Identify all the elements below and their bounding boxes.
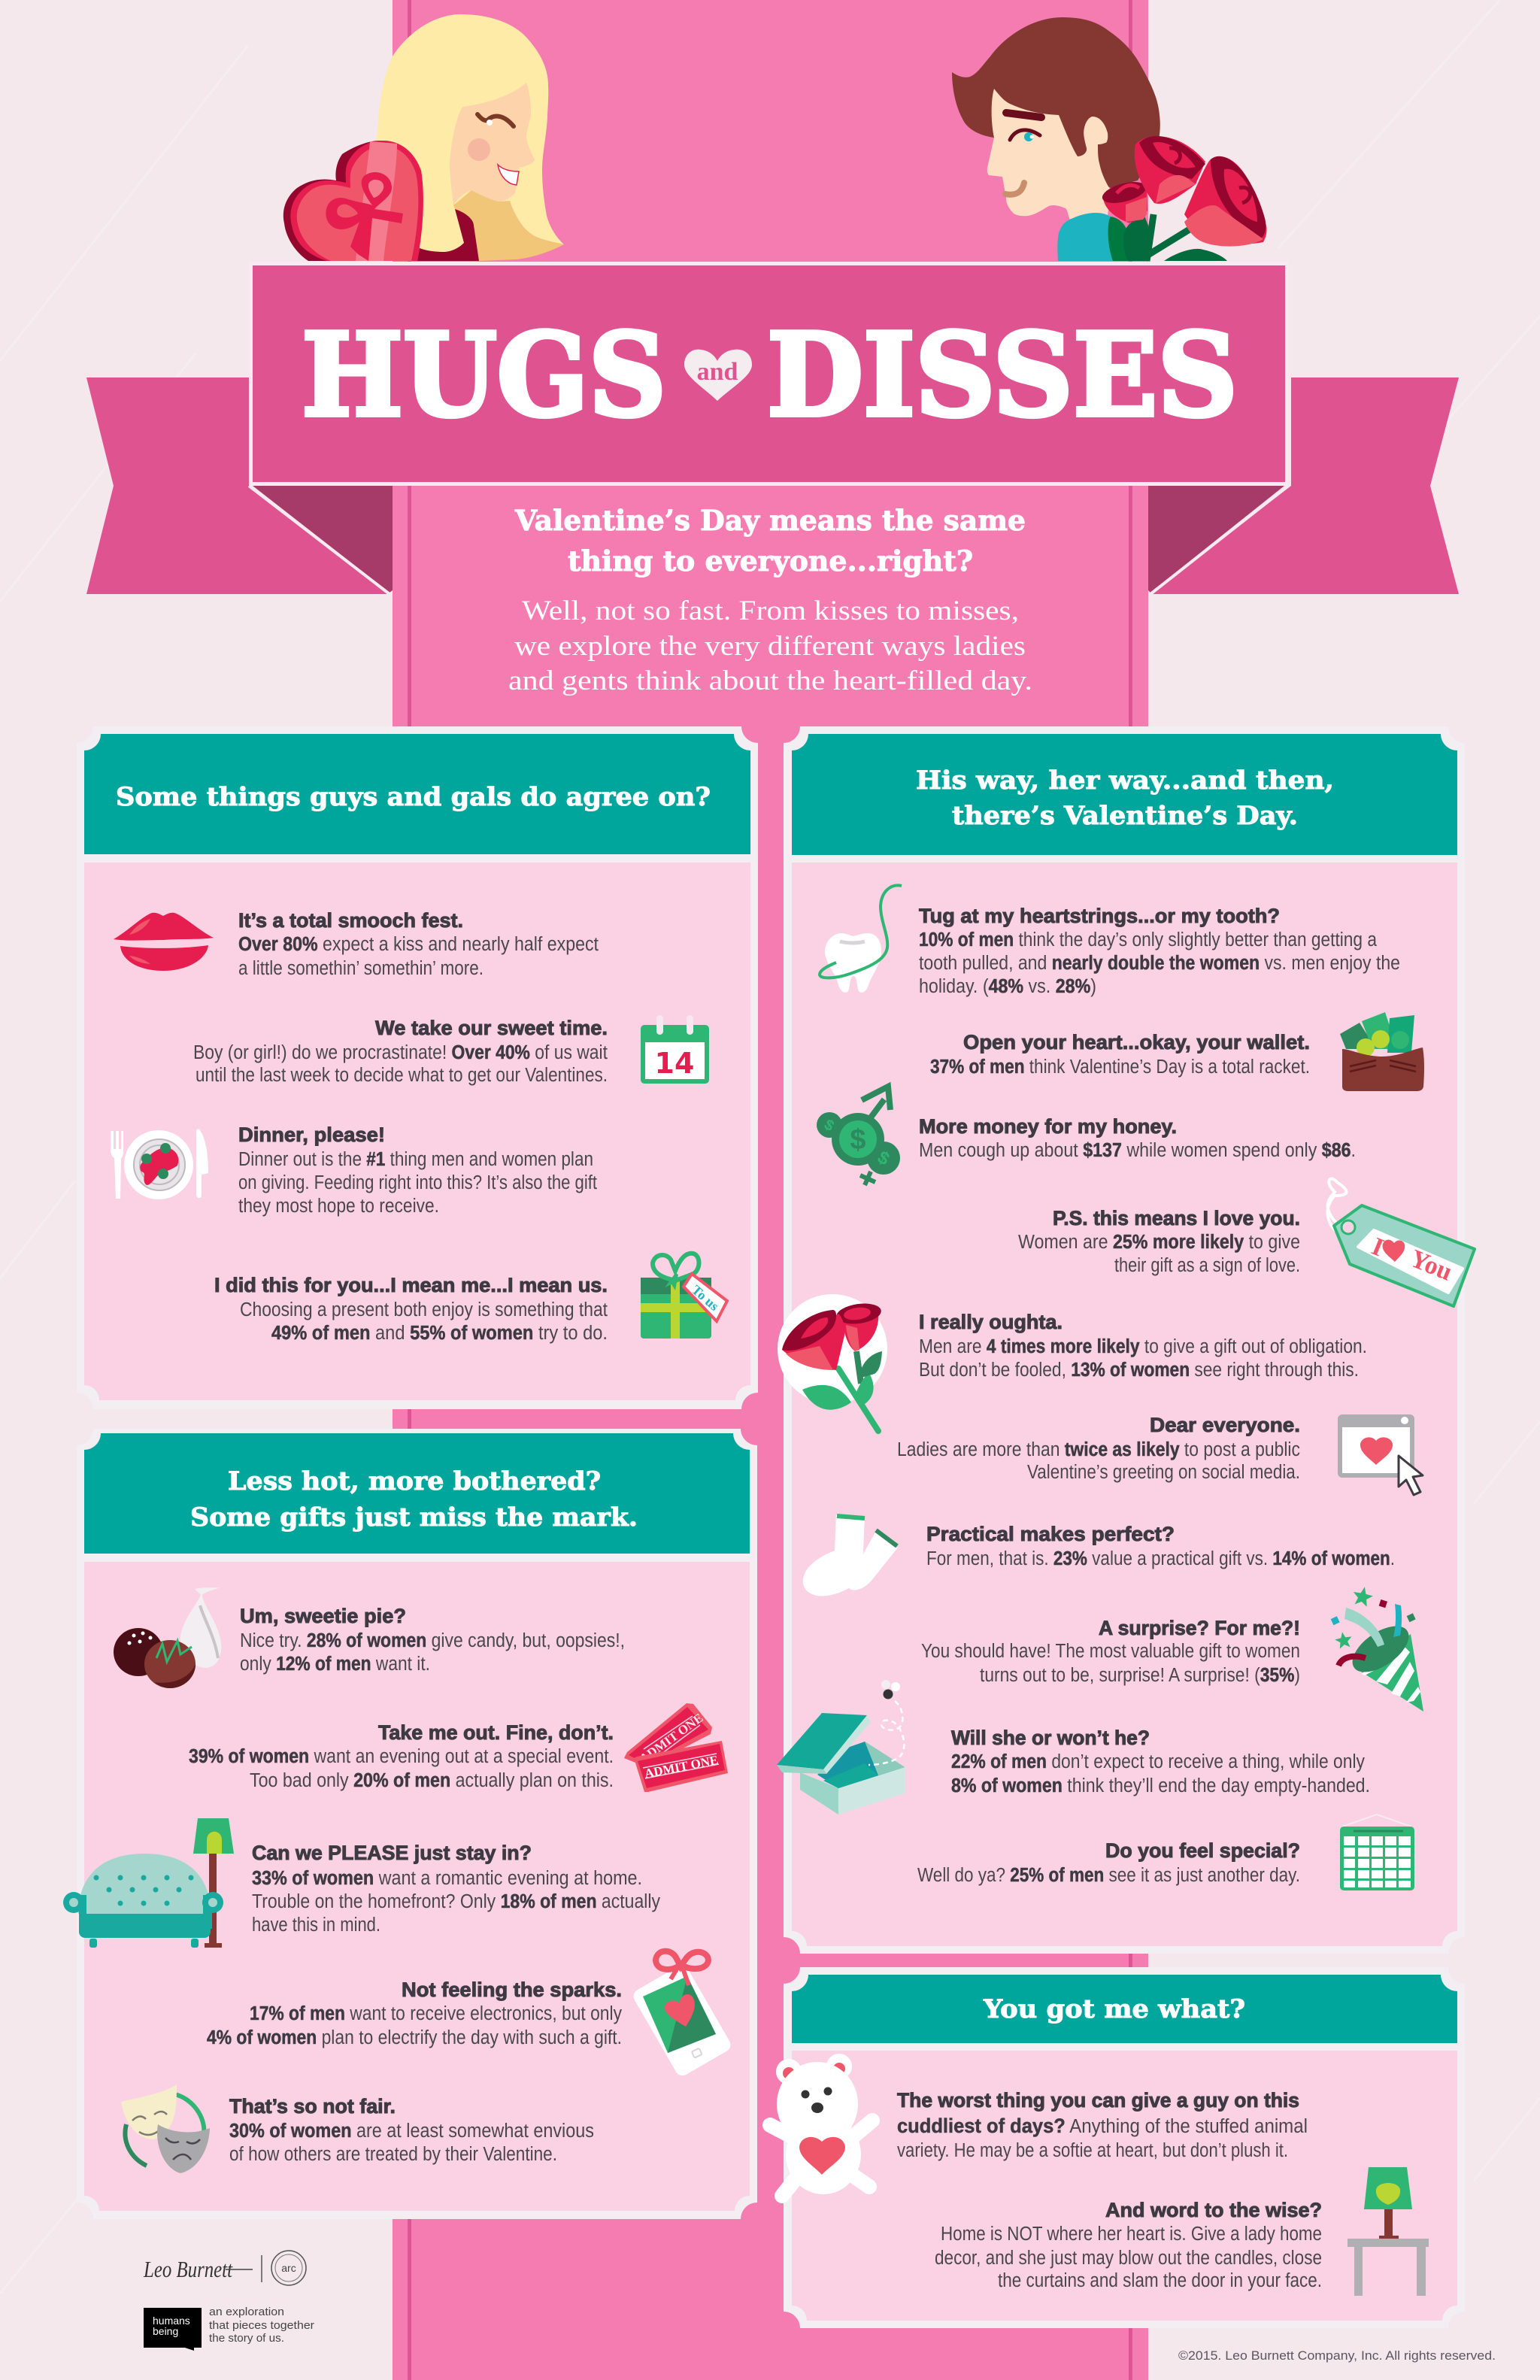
item: word to the wise: the curtains and slam the door in your face. (998, 2270, 1322, 2291)
item: open your heart: 37% of men think Valentine’s Day is a total racket. (930, 1057, 1310, 1078)
logo: humans being (144, 2308, 202, 2351)
item: P.S.: Women are 25% more likely to give (1018, 1232, 1300, 1253)
center pink band (393, 0, 1148, 2380)
item: dear everyone: Ladies are more than twice as likely to post a public (897, 1439, 1300, 1460)
item: not fair: of how others are treated by their Valentine. (229, 2144, 557, 2165)
icon: chocolates (114, 1587, 221, 1688)
item: dear everyone: Dear everyone. (1150, 1414, 1300, 1436)
item: did this for you: 49% of men and 55% of women try to do. (271, 1323, 608, 1344)
item: heartstrings: 10% of men think the day’s only slightly better than getting a (919, 929, 1378, 950)
intro text (508, 596, 1032, 696)
item: will she: 8% of women think they’ll end the day empty-handed. (951, 1775, 1370, 1796)
item: open your heart: Open your heart...okay, your wallet. (963, 1031, 1310, 1054)
item: sparks: Not feeling the sparks. (402, 1978, 622, 2001)
illustration: woman with heart box (283, 14, 564, 261)
tagline: the story of us. (209, 2332, 284, 2345)
item: worst thing: cuddliest of days? Anything of the stuffed animal (897, 2115, 1308, 2137)
item: word to the wise: And word to the wise? (1105, 2199, 1322, 2221)
icon: I love you tag: You (1406, 1245, 1456, 1287)
item: smooch fest: It’s a total smooch fest. (238, 909, 463, 932)
item: sweet time: We take our sweet time. (375, 1017, 608, 1039)
item: did this for you: I did this for you...I mean me...I mean us. (214, 1274, 608, 1296)
icon: I love you tag: I (1368, 1232, 1387, 1262)
item: more money: Men cough up about $137 while women spend only $86. (919, 1140, 1356, 1161)
item: really oughta (919, 1311, 1367, 1381)
item: practical: Practical makes perfect? (926, 1523, 1175, 1545)
item: not fair: That’s so not fair. (229, 2095, 396, 2118)
item: sparks: 17% of men want to receive electronics, but only (250, 2003, 622, 2024)
heading: You got me what? (983, 1994, 1245, 2024)
icon: money gender symbols: $ (821, 1117, 837, 1135)
icon: sofa and floor lamp (63, 1818, 234, 1948)
icon: table lamp (1348, 2167, 1429, 2296)
icon: tooth and floss (820, 885, 902, 993)
item: heartstrings: holiday. (48% vs. 28%) (919, 976, 1096, 997)
logo: Leo Burnett and arc: Leo Burnett (143, 2256, 233, 2282)
item: will she: 22% of men don’t expect to receive a thing, while only (951, 1751, 1365, 1772)
item: sparks: 4% of women plan to electrify the day with such a gift. (207, 2027, 622, 2048)
item: will she (951, 1727, 1370, 1796)
item: sweet time: until the last week to decide what to get our Valentines. (196, 1065, 608, 1086)
item: word to the wise (935, 2199, 1322, 2291)
item: sweetie pie: Um, sweetie pie? (240, 1605, 406, 1627)
heading: His way, her way...and then, (916, 766, 1334, 796)
tagline: an exploration (209, 2306, 284, 2318)
icon: bouquet of roses (1100, 136, 1267, 261)
item: more money: More money for my honey. (919, 1115, 1177, 1138)
icon: gift with tag (641, 1254, 727, 1339)
icon: lips (114, 913, 214, 971)
item: sparks (207, 1978, 622, 2048)
icon: tickets: ADMIT ONE (637, 1711, 705, 1766)
icon: phone gift (631, 1951, 733, 2078)
icon: roses in white circle (778, 1294, 887, 1431)
item: P.S.: P.S. this means I love you. (1053, 1207, 1300, 1229)
item: please stay in: Trouble on the homefront? Only 18% of men actually (252, 1891, 660, 1912)
icon: open gift box with fly (777, 1680, 905, 1815)
item: heartstrings (919, 905, 1400, 997)
item: practical (926, 1523, 1395, 1569)
item: surprise (921, 1617, 1300, 1686)
item: dinner: Dinner, please! (238, 1123, 385, 1146)
icon: wallet (1340, 1012, 1424, 1091)
item: take me out: 39% of women want an evening out at a special event. (189, 1746, 614, 1767)
item: smooch fest (238, 909, 599, 979)
item: P.S.: their gift as a sign of love. (1114, 1255, 1300, 1276)
tagline (209, 2306, 314, 2345)
item: word to the wise: decor, and she just may blow out the candles, close (935, 2248, 1322, 2269)
heading: there’s Valentine’s Day. (952, 801, 1298, 831)
item: dinner (238, 1123, 597, 1217)
icon: gift with tag: To us (689, 1282, 722, 1314)
logo: humans being: humans (153, 2315, 190, 2327)
icon: calendar 14 (641, 1015, 709, 1084)
item: surprise: A surprise? For me?! (1099, 1617, 1300, 1639)
item: smooch fest: a little somethin’ somethin’ more. (238, 958, 484, 979)
intro subtitle: Valentine’s Day means the same (514, 504, 1026, 537)
icon: money gender symbols: $ (874, 1147, 893, 1170)
intro text: and gents think about the heart-filled day. (508, 665, 1032, 696)
ribbon banner (86, 262, 1459, 594)
illustration: man with roses (952, 17, 1267, 261)
item: heartstrings: Tug at my heartstrings...or my tooth? (919, 905, 1280, 927)
item: worst thing: The worst thing you can give a guy on this (897, 2089, 1299, 2112)
item: heartstrings: tooth pulled, and nearly double the women vs. men enjoy the (919, 953, 1400, 974)
icon: wall calendar (1340, 1815, 1414, 1890)
item: surprise: turns out to be, surprise! A surprise! (35%) (980, 1665, 1300, 1686)
item: sweet time (193, 1017, 608, 1086)
item: word to the wise: Home is NOT where her heart is. Give a lady home (941, 2224, 1322, 2245)
item: will she: Will she or won’t he? (951, 1727, 1150, 1749)
item: really oughta: But don’t be fooled, 13% of women see right through this. (919, 1360, 1359, 1381)
item: P.S. (1018, 1207, 1300, 1276)
title: HUGS and DISSES: DISSES (767, 308, 1238, 442)
item: feel special (917, 1839, 1300, 1886)
logo: Leo Burnett and arc (143, 2251, 306, 2285)
title: HUGS and DISSES: and (697, 358, 738, 386)
heading: Some things guys and gals do agree on? (116, 782, 711, 812)
intro subtitle (514, 504, 1026, 578)
item: more money (919, 1115, 1356, 1161)
item: surprise: You should have! The most valuable gift to women (921, 1641, 1300, 1662)
panel: less hot more bothered (63, 1429, 757, 2219)
heading: Less hot, more bothered? (228, 1466, 601, 1496)
heading: Some gifts just miss the mark. (190, 1502, 638, 1533)
icon: tickets (624, 1703, 728, 1792)
item: dinner: Dinner out is the #1 thing men and women plan (238, 1149, 593, 1170)
icon: browser with heart and cursor (1338, 1414, 1423, 1495)
icon: tickets: ADMIT ONE (644, 1753, 720, 1781)
heading (190, 1466, 638, 1533)
icon: dinner plate (111, 1129, 208, 1199)
item: feel special: Do you feel special? (1105, 1839, 1300, 1862)
item: dinner: they most hope to receive. (238, 1196, 439, 1217)
item: sweetie pie: Nice try. 28% of women give candy, but, oopsies!, (240, 1630, 625, 1651)
item: practical: For men, that is. 23% value a practical gift vs. 14% of women. (926, 1548, 1395, 1569)
icon: socks (803, 1514, 898, 1596)
item: not fair: 30% of women are at least somewhat envious (229, 2121, 594, 2142)
item: dear everyone: Valentine’s greeting on social media. (1027, 1462, 1300, 1483)
icon: calendar 14: 14 (655, 1047, 694, 1080)
item: dear everyone (897, 1414, 1300, 1483)
intro text: Well, not so fast. From kisses to misses, (522, 596, 1019, 626)
icon: money gender symbols: $ (850, 1124, 866, 1156)
panel: you got me what (770, 1967, 1465, 2328)
item: did this for you: Choosing a present both enjoy is something that (240, 1299, 608, 1320)
panel: some things guys and gals agree on (77, 726, 758, 1409)
logo: Leo Burnett and arc: arc (281, 2262, 296, 2274)
icon: money gender symbols (817, 1087, 900, 1185)
item: dinner: on giving. Feeding right into this? It’s also the gift (238, 1172, 597, 1193)
item: smooch fest: Over 80% expect a kiss and nearly half expect (238, 934, 599, 955)
item: feel special: Well do ya? 25% of men see it as just another day. (917, 1865, 1300, 1886)
logo: humans being: being (153, 2325, 178, 2337)
icon: theater masks (121, 2084, 210, 2173)
item: really oughta: I really oughta. (919, 1311, 1063, 1333)
copyright: ©2015. Leo Burnett Company, Inc. All rights reserved. (1178, 2348, 1496, 2363)
item: please stay in: have this in mind. (252, 1915, 380, 1936)
title: HUGS and DISSES: HUGS (302, 308, 666, 442)
item: worst thing (897, 2089, 1308, 2161)
intro subtitle: thing to everyone...right? (568, 544, 973, 578)
item: worst thing: variety. He may be a softie at heart, but don’t plush it. (897, 2140, 1288, 2161)
icon: heart chocolate box (283, 141, 423, 261)
icon: teddy bear (770, 2054, 872, 2196)
item: please stay in: Can we PLEASE just stay in? (252, 1842, 532, 1864)
icon: party popper (1331, 1585, 1423, 1711)
panel: his way her way (777, 726, 1475, 1954)
item: not fair (229, 2095, 594, 2165)
item: open your heart (930, 1031, 1310, 1078)
title: HUGS and DISSES (302, 308, 1238, 442)
tagline: that pieces together (209, 2319, 314, 2332)
item: please stay in (252, 1842, 660, 1936)
item: sweet time: Boy (or girl!) do we procrastinate! Over 40% of us wait (193, 1042, 608, 1063)
item: sweetie pie (240, 1605, 625, 1675)
heading (916, 766, 1334, 831)
item: really oughta: Men are 4 times more likely to give a gift out of obligation. (919, 1336, 1367, 1357)
item: take me out: Take me out. Fine, don’t. (378, 1721, 614, 1744)
item: sweetie pie: only 12% of men want it. (240, 1654, 430, 1675)
intro text: we explore the very different ways ladies (514, 631, 1026, 662)
item: take me out: Too bad only 20% of men actually plan on this. (250, 1770, 614, 1791)
item: please stay in: 33% of women want a romantic evening at home. (252, 1868, 642, 1889)
item: did this for you (214, 1274, 608, 1344)
icon: I love you tag (1328, 1179, 1475, 1306)
item: take me out (189, 1721, 614, 1791)
